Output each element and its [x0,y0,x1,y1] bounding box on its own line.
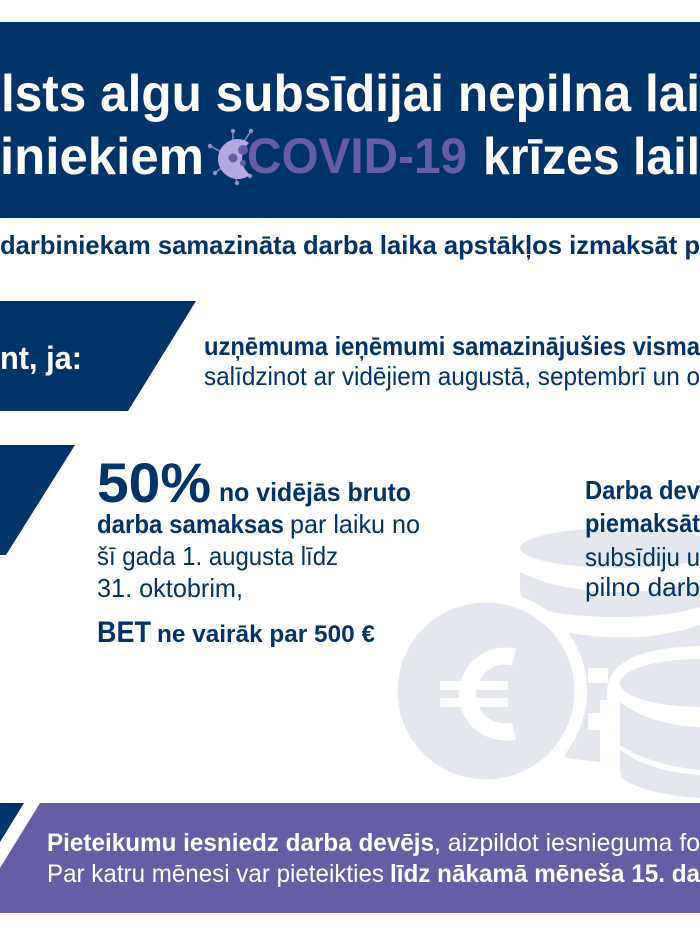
condition label shape: nt, ja: [0,340,82,376]
back stack body [565,625,700,762]
navy corner marker [0,803,24,842]
amount text: darba samaksas [97,509,284,539]
amount text: 31. oktobrim, [97,573,243,603]
euro coin [385,590,587,792]
subtitle: darbiniekam samazināta darba laika apstākļos izmaksāt p [0,230,700,260]
lower stack [607,646,700,815]
amount marker shape [0,445,75,555]
application text: Pieteikumu iesniedz darba devējs [47,829,434,857]
amount text: par laiku no [290,509,420,539]
amount text: 50% [97,451,211,514]
application text [47,829,700,888]
condition text [204,331,700,391]
panel: amount [0,445,700,649]
title line 2 start: iniekiem [0,128,204,186]
icon: virus [208,130,252,184]
panel: application [0,803,700,913]
employer top-up text: pilno darb [585,572,700,602]
icon: coins [385,528,700,815]
amount text [97,451,420,649]
application text: Par katru mēnesi var pieteikties [47,860,384,888]
amount text: BET [97,616,151,649]
header banner [0,22,700,218]
COVID-19 label: COVID-19 [247,128,467,184]
condition label shape [0,301,196,411]
panel: condition [0,301,700,411]
employer top-up text [585,475,700,602]
purple bar [0,803,700,913]
amount text: ne vairāk par 500 € [157,621,375,648]
amount text: šī gada 1. augusta līdz [97,541,338,571]
application text: , aizpildot iesnieguma fo [434,829,700,857]
amount text: no vidējās bruto [219,477,411,507]
top stack [520,572,700,617]
